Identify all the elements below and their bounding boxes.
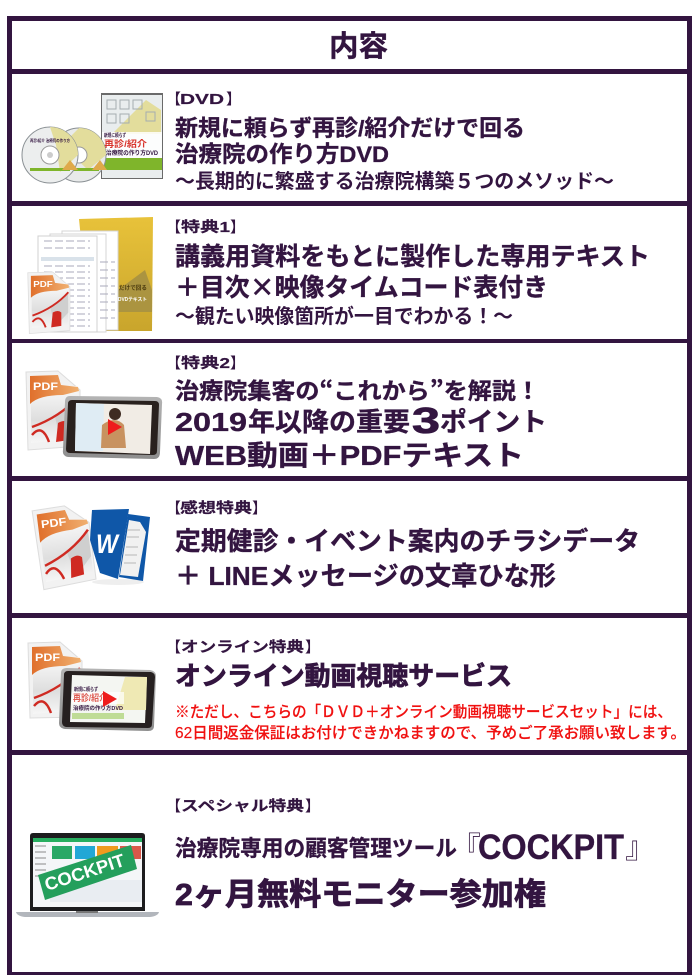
heading: feedback bonus line 2: ＋ LINEメッセージの文章ひな形 [175, 561, 556, 591]
icon: DVD case and discs [22, 93, 163, 183]
subheading: bonus 1: ～観たい映像箇所が一目でわかる！～ [175, 304, 513, 328]
panel: special bonus [16, 795, 655, 917]
icon: PDF and online video tablet: 治療院の作り方DVD [73, 704, 123, 712]
number: 3: 3 [412, 400, 440, 441]
title: 内容 [329, 30, 388, 63]
heading: bonus 2 year: 2019 [175, 407, 247, 437]
label: DVD: 【 [166, 88, 181, 109]
label: DVD [166, 88, 241, 109]
label: online bonus: オンライン特典 [181, 638, 305, 656]
heading: DVD line 1: 新規に頼らず再診/紹介だけで回る [175, 116, 525, 141]
icon: PDF and online video tablet [28, 642, 156, 731]
heading: DVD line 2: 治療院の作り方DVD [175, 142, 389, 167]
label: bonus 2 [166, 352, 245, 373]
icon: PDF: PDF [33, 279, 53, 289]
icon: DVD case and discs: 再診/紹介 治療院の作り方 [30, 137, 70, 143]
panel: bonus 1 [28, 216, 650, 334]
label: special bonus: スペシャル特典 [181, 797, 305, 815]
label: special bonus: 【 [166, 795, 181, 816]
icon: PDF: PDF [40, 516, 67, 531]
heading: COCKPIT name: 『 [451, 823, 481, 867]
label: bonus 2: 特典2 [181, 354, 230, 372]
icon: PDF: PDF [35, 652, 60, 664]
subheading: DVD: ～長期的に繁盛する治療院構築５つのメソッド～ [175, 169, 614, 193]
label: feedback bonus: 】 [252, 497, 267, 518]
label: bonus 1: 特典1 [181, 218, 230, 236]
label: online bonus: 】 [305, 636, 320, 657]
icon: laptop with COCKPIT: COCKPIT [42, 850, 127, 895]
icon: PDF and online video tablet: 再診/紹介 [73, 692, 107, 703]
panel: feedback bonus [32, 497, 640, 591]
icon: text booklet, sheets and PDF [28, 217, 153, 334]
icon: text booklet, sheets and PDF: DVDテキスト [118, 297, 147, 303]
label: bonus 2: 【 [166, 352, 181, 373]
label: online bonus [166, 636, 320, 657]
heading: COCKPIT name [451, 823, 655, 867]
panel: DVD [22, 88, 614, 193]
label: special bonus: 】 [305, 795, 320, 816]
label: bonus 1: 【 [166, 216, 181, 237]
label: DVD: DVD [180, 92, 224, 108]
label: feedback bonus: 感想特典 [180, 499, 253, 517]
heading: bonus 2 line 3: WEB動画＋PDFテキスト [175, 440, 524, 471]
icon: PDF and online video tablet: 新規に頼らず [74, 686, 98, 693]
heading: bonus 2 line 2: 年以降の重要 [248, 407, 410, 437]
icon: PDF and Word [32, 503, 150, 590]
icon: PDF and video tablet [26, 371, 162, 459]
label: bonus 2: 】 [230, 352, 245, 373]
heading: bonus 2 points: ポイント [440, 407, 547, 437]
heading: bonus 1 line 1: 講義用資料をもとに製作した専用テキスト [175, 243, 650, 271]
heading: COCKPIT name: 』 [625, 823, 655, 867]
heading: special bonus line 1: 治療院専用の顧客管理ツール [175, 836, 457, 861]
heading: online bonus: オンライン動画視聴サービス [175, 661, 512, 691]
note: line 2: 62日間返金保証はお付けできかねますので、予めご了承お願い致します。 [175, 724, 686, 742]
heading: special bonus line 2: 2ヶ月無料モニター参加権 [175, 877, 546, 912]
label: bonus 1 [166, 216, 245, 237]
icon: DVD case and discs: 治療院の作り方DVD [106, 149, 159, 157]
icon: PDF: PDF [33, 381, 58, 393]
icon: text booklet, sheets and PDF: だけで回る [119, 284, 147, 292]
icon: DVD case and discs: 新規に頼らず [104, 132, 126, 139]
icon: PDF and Word: W [96, 529, 120, 559]
heading: bonus 1 line 2: ＋目次×映像タイムコード表付き [175, 268, 548, 304]
icon: DVD case and discs: 再診/紹介 [104, 138, 147, 149]
label: DVD: 】 [226, 88, 241, 109]
panel: bonus 2 [26, 352, 547, 471]
heading: bonus 2 line 1: 治療院集客の“これから”を解説！ [175, 374, 540, 406]
label: feedback bonus [166, 497, 267, 518]
panel: online bonus [28, 636, 686, 742]
heading: COCKPIT name: COCKPIT [478, 828, 624, 867]
label: feedback bonus: 【 [166, 497, 181, 518]
note: line 1: ※ただし、こちらの「ＤＶＤ＋オンライン動画視聴サービスセット」には、 [175, 703, 672, 721]
icon: laptop with COCKPIT [16, 833, 159, 917]
label: special bonus [166, 795, 320, 816]
heading: feedback bonus line 1: 定期健診・イベント案内のチラシデータ [175, 526, 640, 556]
label: bonus 1: 】 [230, 216, 245, 237]
label: online bonus: 【 [166, 636, 181, 657]
